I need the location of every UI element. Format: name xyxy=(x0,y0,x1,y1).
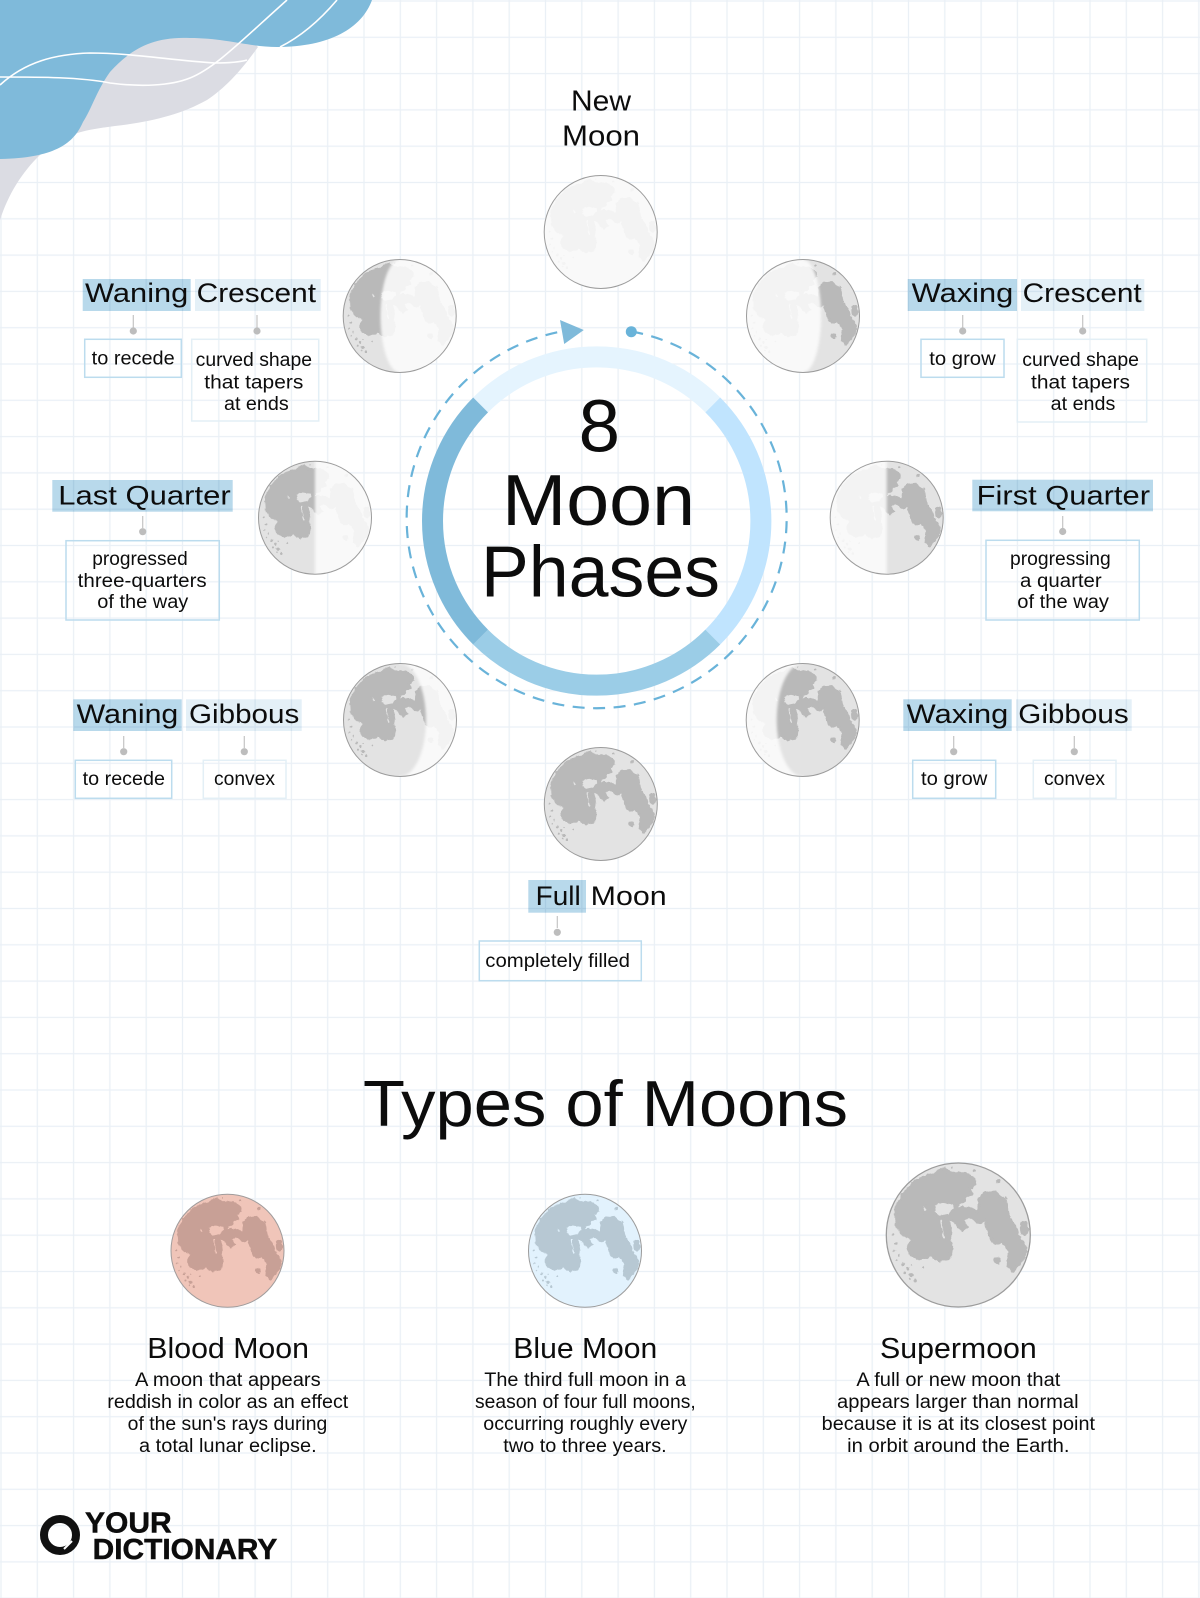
panel: first quarter xyxy=(830,461,1153,620)
panel: blood moon xyxy=(107,1194,349,1457)
title: 8 Moon Phases: 8 xyxy=(579,385,620,468)
heading: full moon xyxy=(528,880,667,913)
moon: super xyxy=(886,1163,1030,1307)
description: blood moon: A moon that appears xyxy=(135,1370,321,1391)
moon: blood xyxy=(171,1194,284,1307)
moon: waning gibbous xyxy=(344,664,456,776)
note: curved shape: that tapers xyxy=(204,372,303,393)
heading: waning crescent: Crescent xyxy=(197,278,317,308)
heading: blood moon: Blood Moon xyxy=(147,1333,309,1365)
connector xyxy=(554,916,561,936)
moon: full xyxy=(544,748,657,860)
connectors xyxy=(959,315,1086,335)
panel: blue moon xyxy=(475,1194,696,1457)
note: to recede xyxy=(75,760,172,798)
moon: waxing gibbous xyxy=(746,664,859,776)
note: to recede xyxy=(85,339,181,377)
description: blood moon: reddish in color as an effect xyxy=(107,1392,349,1413)
description: supermoon: because it is at its closest point xyxy=(822,1414,1096,1435)
description: blue moon: season of four full moons, xyxy=(475,1392,696,1413)
heading: waning gibbous: Gibbous xyxy=(189,699,299,729)
connectors xyxy=(950,736,1078,755)
note: completely filled: completely filled xyxy=(485,951,630,972)
title: 8 Moon Phases: Phases xyxy=(481,532,720,612)
connector xyxy=(1059,516,1066,535)
title: 8 Moon Phases xyxy=(481,385,720,612)
description: blood moon xyxy=(107,1370,349,1457)
note: convex: convex xyxy=(214,769,276,790)
connector xyxy=(139,516,146,535)
moon: waning crescent xyxy=(343,260,456,372)
description: supermoon: A full or new moon that xyxy=(856,1370,1061,1391)
note: to grow xyxy=(921,339,1004,377)
note: curved shape: that tapers xyxy=(1031,372,1130,393)
note: to grow: to grow xyxy=(921,769,988,790)
logo: YourDictionary: DICTIONARY xyxy=(93,1534,277,1566)
heading: new moon xyxy=(562,86,640,152)
description: blood moon: a total lunar eclipse. xyxy=(139,1436,317,1457)
heading: waxing crescent: Waxing xyxy=(912,278,1013,308)
note: to grow xyxy=(913,760,996,798)
description: blue moon: The third full moon in a xyxy=(484,1370,686,1391)
note: curved shape: curved shape xyxy=(196,350,312,371)
heading: new moon: Moon xyxy=(562,120,640,152)
description: supermoon: appears larger than normal xyxy=(837,1392,1079,1413)
heading: supermoon: Supermoon xyxy=(880,1333,1037,1365)
note: to recede: to recede xyxy=(92,348,175,369)
panel: last quarter xyxy=(52,461,372,620)
heading: waxing gibbous: Waxing xyxy=(907,699,1008,729)
moon: waxing crescent xyxy=(746,260,860,372)
panel: waning crescent xyxy=(83,260,456,421)
note: to recede: to recede xyxy=(83,769,165,790)
panel: waxing gibbous xyxy=(746,664,1132,798)
note: progressing a quarter: progressing xyxy=(1010,549,1111,570)
heading: new moon: New xyxy=(571,86,632,118)
heading: waning gibbous xyxy=(73,699,302,731)
segmented central ring xyxy=(433,357,761,685)
heading: waxing crescent xyxy=(908,278,1144,311)
logo: YourDictionary: YOUR xyxy=(85,1508,172,1540)
note: completely filled xyxy=(479,941,641,981)
moon: blue xyxy=(528,1194,642,1307)
note: curved shape: at ends xyxy=(224,394,289,415)
panel: full moon xyxy=(479,748,667,981)
note: curved shape xyxy=(192,339,319,421)
note: convex xyxy=(1033,760,1116,798)
note: progressed three-quarters: three-quarters xyxy=(78,571,207,592)
description: blue moon: two to three years. xyxy=(503,1436,667,1457)
panel: new moon xyxy=(544,86,657,288)
description: supermoon: in orbit around the Earth. xyxy=(847,1436,1070,1457)
heading: waning crescent xyxy=(83,278,321,311)
heading: full moon: Full xyxy=(536,881,581,911)
heading: waxing crescent: Crescent xyxy=(1023,278,1142,308)
description: blue moon: occurring roughly every xyxy=(483,1414,688,1435)
note: progressed three-quarters xyxy=(66,541,219,620)
note: progressing a quarter: a quarter xyxy=(1020,571,1102,592)
decorative wave: top left corner xyxy=(0,0,372,220)
description: supermoon xyxy=(822,1370,1096,1457)
heading: full moon: Moon xyxy=(591,881,667,911)
heading: waning crescent: Waning xyxy=(85,278,188,308)
heading: first quarter: First Quarter xyxy=(977,480,1150,510)
note: progressing a quarter xyxy=(986,540,1139,620)
note: convex: convex xyxy=(1044,769,1106,790)
note: convex xyxy=(203,760,286,798)
heading: blue moon: Blue Moon xyxy=(513,1333,657,1365)
logo: YourDictionary xyxy=(44,1508,277,1566)
moon: new xyxy=(544,176,657,288)
note: curved shape: at ends xyxy=(1051,394,1115,415)
note: to grow: to grow xyxy=(929,349,996,370)
description: blood moon: of the sun's rays during xyxy=(128,1414,327,1435)
note: progressing a quarter: of the way xyxy=(1017,592,1110,613)
connectors xyxy=(130,315,261,335)
panel: waxing crescent xyxy=(746,260,1147,422)
heading: types of moons: Types of Moons xyxy=(363,1067,848,1140)
note: progressed three-quarters: of the way xyxy=(97,592,189,613)
panel: supermoon xyxy=(822,1163,1096,1457)
arrow: dashed clockwise cycle xyxy=(407,320,787,708)
heading: last quarter: Last Quarter xyxy=(58,480,231,510)
note: progressed three-quarters: progressed xyxy=(92,549,188,570)
title: 8 Moon Phases: Moon xyxy=(502,461,695,541)
note: curved shape xyxy=(1017,339,1147,422)
moon: first quarter xyxy=(830,461,943,574)
heading: waning gibbous: Waning xyxy=(77,699,178,729)
heading: waxing gibbous xyxy=(903,699,1132,731)
note: curved shape: curved shape xyxy=(1022,350,1139,371)
panel: waning gibbous xyxy=(73,664,457,798)
connectors xyxy=(120,736,248,755)
moon: last quarter xyxy=(258,461,372,574)
description: blue moon xyxy=(475,1370,696,1457)
heading: waxing gibbous: Gibbous xyxy=(1018,699,1129,729)
